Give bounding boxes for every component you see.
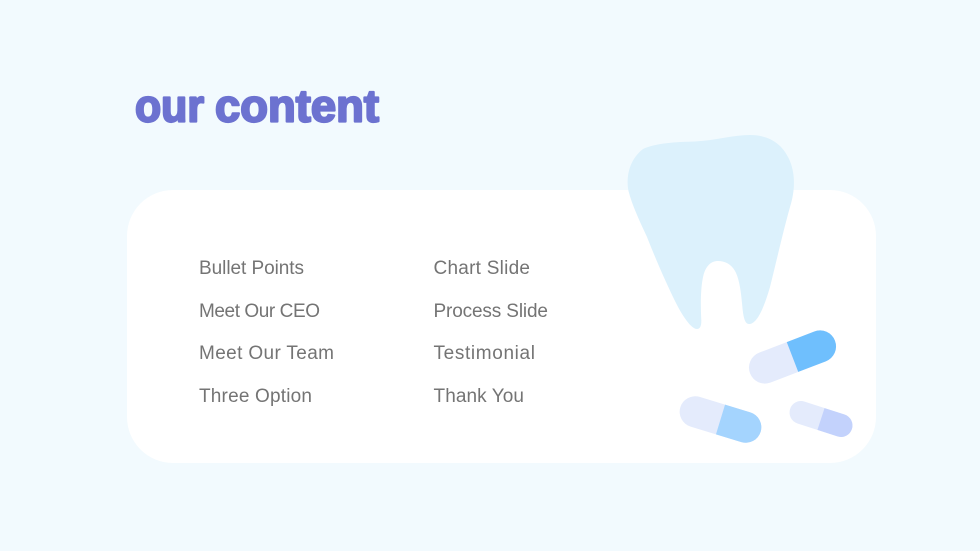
item: Three Option: Three Option <box>199 386 312 407</box>
icon: tooth <box>628 135 794 329</box>
title: our <box>135 80 204 132</box>
icon: small capsule <box>787 398 855 440</box>
title: content <box>215 80 379 132</box>
panel: content card <box>127 190 876 463</box>
item: Meet Our Team: Meet Our Team <box>199 343 334 364</box>
icon: medium capsule <box>676 392 765 447</box>
list: left column <box>199 258 334 407</box>
icon: large capsule <box>744 326 841 388</box>
item: Testimonial: Testimonial <box>434 343 535 364</box>
item: Process Slide: Process Slide <box>434 301 548 322</box>
item: Meet Our CEO: Meet Our CEO <box>199 301 320 322</box>
title <box>135 80 379 132</box>
list: right column <box>434 258 548 407</box>
item: Chart Slide: Chart Slide <box>434 258 530 279</box>
item: Thank You: Thank You <box>434 386 524 407</box>
item: Bullet Points: Bullet Points <box>199 258 304 279</box>
